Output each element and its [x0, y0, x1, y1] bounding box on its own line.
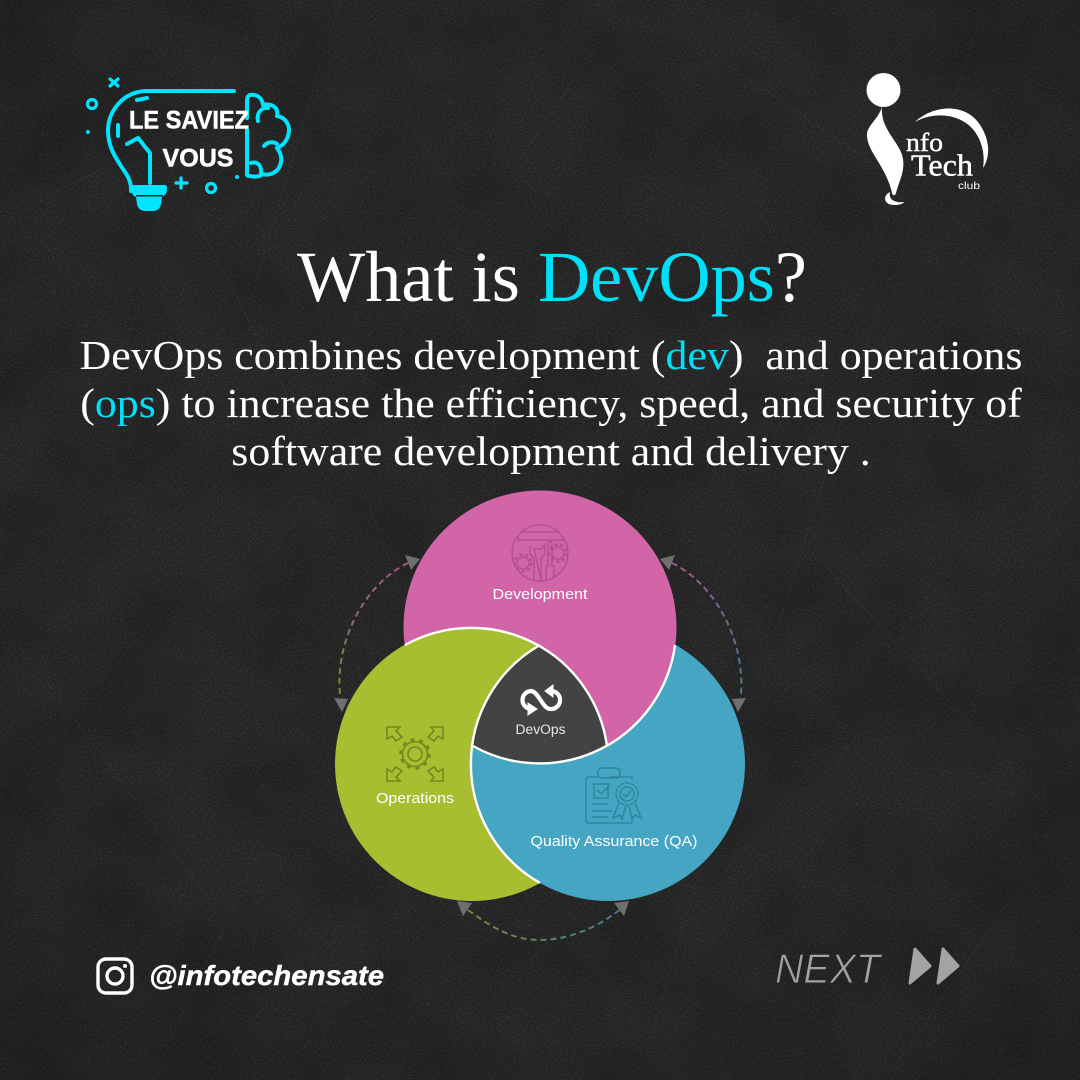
icon: double arrow [910, 949, 958, 983]
logo words: nfo [906, 128, 943, 157]
icon: crescent arc [915, 108, 988, 168]
handle text: @infotechensate [149, 960, 384, 991]
icon: i figure [866, 73, 900, 107]
white separators [405, 628, 675, 883]
instagram handle [98, 959, 384, 993]
circle: quality assurance [471, 627, 745, 901]
icon: devops loop [523, 685, 560, 715]
title: What is DevOps? [297, 237, 807, 317]
label: quality assurance: Quality Assurance (QA) [530, 834, 698, 850]
logo: Le Saviez Vous lightbulb [86, 79, 289, 211]
icon: bulb base [131, 185, 167, 211]
circle: development [404, 490, 676, 764]
icon: operations gear [387, 727, 443, 781]
overlap: development over quality [473, 628, 675, 763]
next button [775, 945, 958, 992]
icon: quality clipboard [586, 768, 641, 823]
logo: InfoTech club: club [958, 181, 981, 192]
next text: NEXT [775, 945, 883, 992]
label: operations: Operations [376, 791, 454, 807]
dashed cycle arrow: bottom [457, 901, 629, 940]
label: development: Development [492, 587, 588, 603]
icon: development tools [512, 525, 568, 581]
overlap: operations over development [405, 628, 607, 763]
venn diagram [334, 490, 746, 940]
label: devops: DevOps [516, 722, 566, 737]
icon: instagram [98, 959, 132, 993]
logo: InfoTech club [866, 73, 988, 205]
logo: Le Saviez Vous lightbulb: VOUS [162, 144, 234, 172]
logo text: LE SAVIEZ [129, 106, 249, 134]
circle: operations [335, 627, 609, 901]
description text: DevOps combines development (dev) and operations (ops) to increase the efficiency, speed, and security of software development and delivery . [80, 332, 1022, 474]
icon: decorative sparks [86, 79, 238, 192]
dashed cycle arrow: left [334, 555, 420, 712]
overlap: quality over operations [471, 645, 609, 883]
icon: lightbulb outline [108, 91, 289, 191]
center: devops [473, 645, 607, 764]
dashed cycle arrow: right [660, 555, 746, 712]
logo: InfoTech club: Tech [911, 148, 974, 182]
